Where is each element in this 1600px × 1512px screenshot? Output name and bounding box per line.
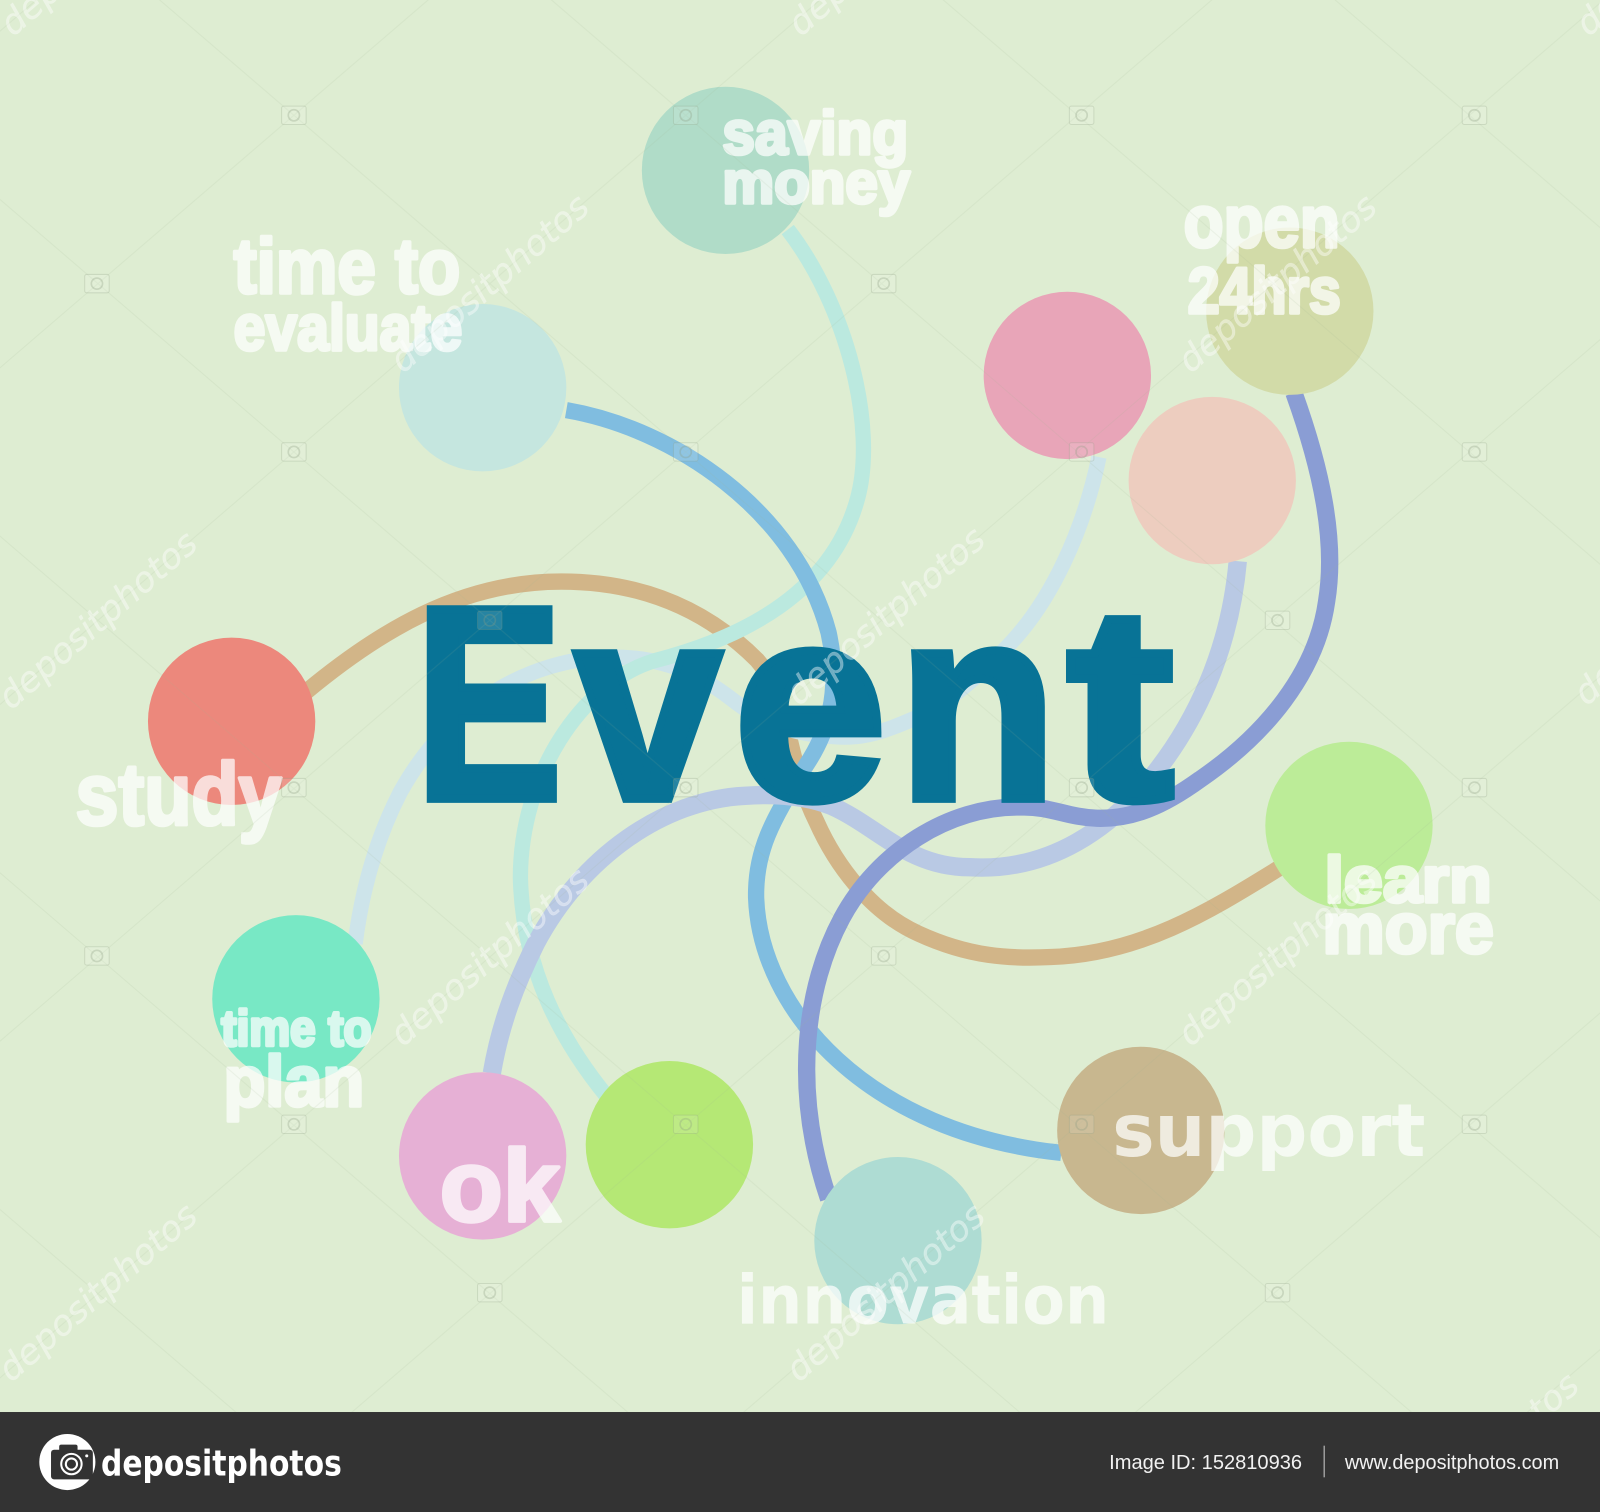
title: t [1067, 551, 1174, 858]
circle: peach [1129, 397, 1296, 564]
watermark text: depositphotos [382, 187, 597, 381]
label: time to evaluate: time to [234, 224, 460, 310]
circle: green [586, 1061, 753, 1228]
circle: time to evaluate [399, 304, 566, 471]
circle: saving money [642, 87, 809, 254]
title: v [575, 551, 723, 858]
label: ok: ok [440, 1129, 560, 1243]
watermark text: depositphotos [382, 860, 597, 1054]
label: study: study [76, 745, 282, 843]
connector curves [306, 230, 1330, 1199]
label: open 24hrs: 24hrs [1188, 254, 1341, 327]
label: innovation: innovation [737, 1260, 1109, 1339]
label: learn more [1322, 843, 1494, 969]
curve: pale periwinkle, peach circle to ok [492, 561, 1238, 1073]
label: open 24hrs [1184, 180, 1341, 327]
footer bar [0, 1412, 1600, 1512]
divider [1323, 1446, 1325, 1477]
label: time to plan: plan [223, 1042, 364, 1122]
watermark text: depositphotos [1170, 860, 1385, 1054]
label: open 24hrs: open [1184, 180, 1340, 263]
watermark camera icons [85, 106, 1487, 1302]
image id: Image ID: 152810936 [1109, 1452, 1302, 1474]
curve: blue, time to evaluate to support [566, 410, 1061, 1153]
circle: ok [399, 1072, 566, 1240]
circle: learn more [1265, 742, 1433, 909]
label: learn more: learn [1324, 843, 1492, 916]
labels [76, 99, 1494, 1339]
label: time to evaluate [234, 224, 462, 364]
circle: innovation [814, 1157, 982, 1324]
title: E [415, 551, 562, 858]
curve: periwinkle, open 24hrs to innovation [807, 393, 1330, 1199]
label: saving money: money [722, 149, 910, 216]
label: learn more: more [1322, 889, 1494, 969]
curve: light blue, pink circle to time to plan [355, 457, 1099, 944]
label: time to evaluate: evaluate [234, 291, 462, 364]
label: time to plan: time to [221, 1001, 371, 1057]
label: saving money [722, 99, 910, 216]
website url: www.depositphotos.com [1344, 1452, 1559, 1474]
circle: study [148, 638, 315, 805]
label: support: support [1112, 1089, 1426, 1174]
curve: tan, study to learn more [306, 582, 1281, 958]
watermark text: depositphotos [778, 1196, 993, 1390]
title: n [898, 551, 1057, 858]
icon: camera logo [39, 1434, 95, 1490]
label: time to plan [221, 1001, 371, 1122]
label: saving money: saving [722, 99, 908, 167]
circle: open 24hrs [1206, 228, 1373, 395]
watermark text: depositphotos [778, 519, 993, 713]
curve: mint, saving money to green circle [520, 230, 863, 1097]
circle: support [1057, 1047, 1224, 1214]
watermark text: depositphotos [1170, 187, 1385, 381]
node circles [148, 87, 1433, 1324]
logo wordmark: depositphotos [101, 1443, 342, 1484]
circle: pink [984, 292, 1151, 459]
title: e [734, 551, 887, 858]
circle: time to plan [212, 915, 380, 1082]
